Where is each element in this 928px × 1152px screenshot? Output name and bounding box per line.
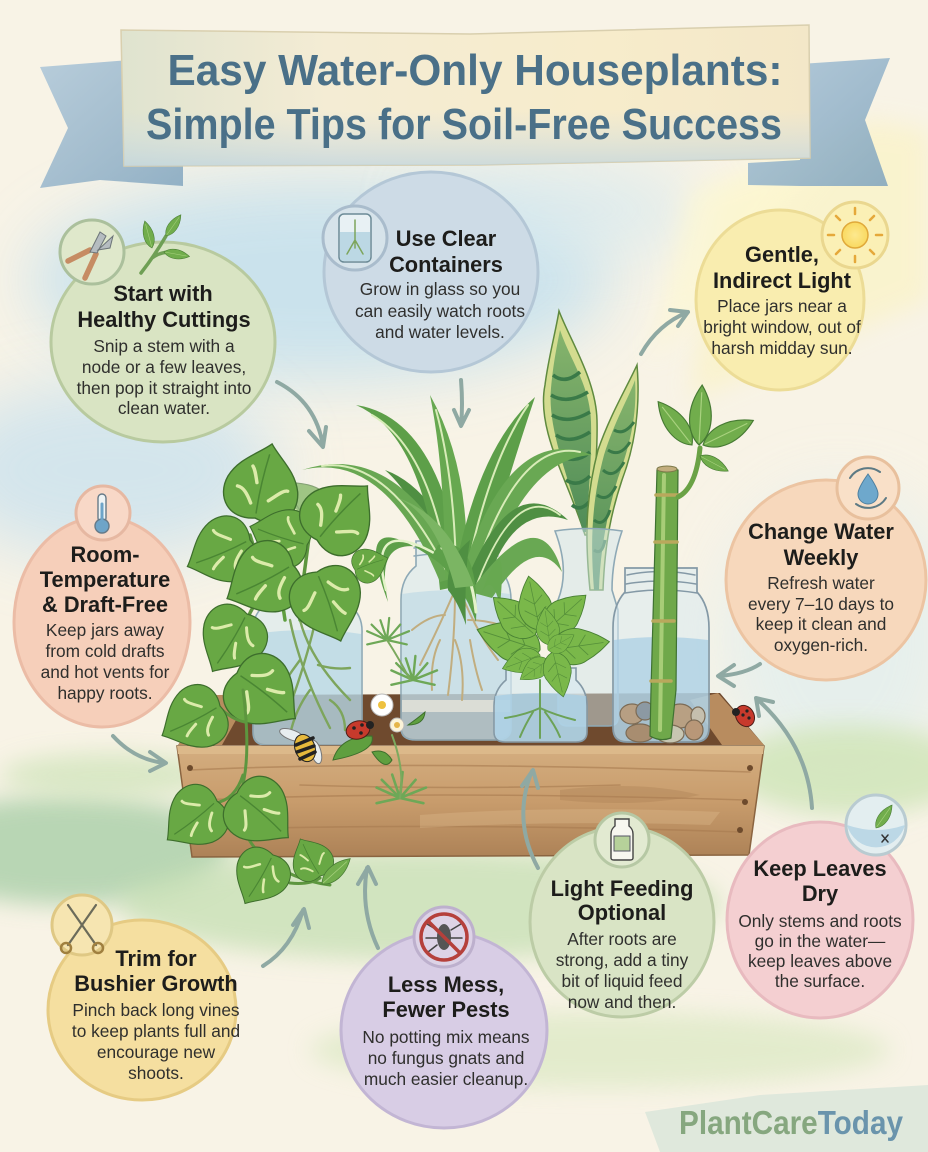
panel: trim for bushier growth: shoots.	[128, 1063, 184, 1083]
icon: sprig	[140, 212, 190, 273]
panel: gentle indirect light: bright window, out of	[703, 317, 861, 337]
mint leaves	[471, 573, 612, 700]
arrow: pests to crate	[358, 867, 378, 948]
bamboo stalk	[650, 468, 678, 740]
panel: use clear containers	[323, 172, 538, 372]
arrow: temperature to crate	[113, 736, 166, 771]
title text: Simple Tips for Soil-Free Success	[146, 100, 782, 149]
panel: room temperature and draft free: from cold drafts	[45, 641, 165, 661]
panel: light feeding optional: After roots are	[567, 929, 677, 949]
panel: start with healthy cuttings: Healthy Cuttings	[77, 307, 251, 332]
panel: keep leaves dry: keep leaves above	[748, 951, 892, 971]
panel: start with healthy cuttings: clean water.	[118, 398, 210, 418]
icon: sun	[822, 202, 888, 268]
pothos trailing vine	[148, 677, 355, 917]
brand footer: PlantCareToday	[679, 1104, 904, 1141]
panel: change water weekly: every 7–10 days to	[748, 594, 894, 614]
title text: Easy Water-Only Houseplants:	[168, 46, 782, 95]
flowers	[371, 694, 404, 732]
panel: start with healthy cuttings: node or a few leaves,	[82, 357, 246, 377]
panel: light feeding optional: Light Feeding	[551, 876, 693, 901]
panel: change water weekly: Refresh water	[767, 573, 875, 593]
panel: start with healthy cuttings: Start with	[113, 281, 213, 306]
icon: pruning shears	[60, 220, 124, 284]
panel: gentle indirect light: harsh midday sun.	[711, 338, 853, 358]
panel: light feeding optional: strong, add a tiny	[556, 950, 689, 970]
spider plant roots	[412, 590, 500, 700]
pothos foliage upper	[174, 436, 394, 747]
panel: less mess fewer pests	[341, 907, 547, 1128]
panel: use clear containers: can easily watch roots	[355, 301, 525, 321]
pale leaf	[256, 464, 340, 548]
title text	[146, 46, 782, 149]
panel: use clear containers: and water levels.	[375, 322, 505, 342]
panel: room temperature and draft free: Keep jars away	[46, 620, 164, 640]
panel: keep leaves dry: Keep Leaves	[753, 856, 887, 881]
panel: room temperature and draft free	[14, 486, 190, 727]
panel: trim for bushier growth: Pinch back long vines	[72, 1000, 240, 1020]
icon: thermometer	[76, 486, 130, 540]
panel: change water weekly	[726, 457, 926, 680]
icon: ladybug on leaf	[333, 718, 374, 760]
bamboo jar	[613, 385, 758, 743]
pothos roots	[270, 600, 350, 735]
icon: fertilizer bottle	[595, 813, 649, 867]
panel: room temperature and draft free: Temperature	[40, 567, 170, 592]
pebbles	[620, 702, 705, 743]
panel: start with healthy cuttings	[51, 212, 275, 442]
wooden crate back	[178, 693, 764, 745]
panel: use clear containers: Grow in glass so you	[360, 279, 520, 299]
panel: trim for bushier growth: Trim for	[115, 946, 197, 971]
panel: light feeding optional: now and then.	[568, 992, 676, 1012]
panel: use clear containers: Containers	[389, 252, 503, 277]
panel: trim for bushier growth: Bushier Growth	[74, 971, 238, 996]
panel: less mess fewer pests: Less Mess,	[388, 972, 504, 997]
icon: no bugs	[414, 907, 474, 967]
panel: start with healthy cuttings: then pop it straight into	[77, 378, 251, 398]
panel: trim for bushier growth: encourage new	[97, 1042, 216, 1062]
panel: keep leaves dry: go in the water—	[755, 931, 886, 951]
glass vase	[555, 528, 622, 726]
panel: gentle indirect light: Place jars near a	[717, 296, 847, 316]
icon: bee	[278, 726, 324, 765]
arrow: containers to plants	[454, 380, 469, 426]
panel: keep leaves dry: the surface.	[775, 971, 865, 991]
panel: gentle indirect light: Gentle,	[745, 242, 819, 267]
title banner	[40, 25, 890, 188]
panel: room temperature and draft free: Room-	[70, 542, 140, 567]
brand footer	[645, 1085, 928, 1152]
icon: jar	[323, 206, 387, 270]
panel: change water weekly: Change Water	[748, 519, 894, 544]
panel: light feeding optional: Optional	[578, 900, 666, 925]
arrow: water to jar	[718, 664, 760, 686]
icon: water cycle	[837, 457, 899, 519]
panel: room temperature and draft free: and hot vents for	[41, 662, 170, 682]
snake plant in vase	[543, 311, 638, 726]
small plantlets and flowers	[367, 618, 437, 803]
panel: less mess fewer pests: Fewer Pests	[382, 997, 510, 1022]
panel: light feeding optional: bit of liquid feed	[561, 971, 683, 991]
icon: leaf above water	[846, 795, 906, 855]
panel: gentle indirect light: Indirect Light	[713, 268, 851, 293]
panel: room temperature and draft free: happy roots.	[57, 683, 153, 703]
arrow: feeding to crate	[522, 770, 538, 868]
panel: less mess fewer pests: No potting mix means	[362, 1027, 530, 1047]
mint jar	[471, 573, 612, 742]
arrow: plants to light	[641, 310, 688, 354]
arrow: leaves to jar	[756, 698, 812, 808]
spider plant foliage	[302, 395, 592, 625]
panel: change water weekly: keep it clean and	[756, 614, 886, 634]
spider plant jar	[401, 541, 511, 740]
panel: keep leaves dry: Dry	[802, 881, 838, 906]
panel: use clear containers: Use Clear	[396, 226, 497, 251]
panel: keep leaves dry: Only stems and roots	[738, 911, 902, 931]
panel: gentle indirect light	[696, 202, 888, 390]
panel: change water weekly: oxygen-rich.	[774, 635, 868, 655]
panel: less mess fewer pests: no fungus gnats and	[368, 1048, 524, 1068]
panel: light feeding optional	[530, 813, 714, 1017]
ribbon tails	[40, 58, 890, 188]
panel: keep leaves dry	[727, 795, 913, 1018]
arrow: trim to vine	[263, 909, 309, 966]
panel: trim for bushier growth	[48, 895, 240, 1100]
panel: less mess fewer pests: much easier cleanup.	[364, 1069, 528, 1089]
panel: start with healthy cuttings: Snip a stem with a	[93, 336, 235, 356]
icon: scissors	[52, 895, 112, 955]
panel: trim for bushier growth: to keep plants full and	[72, 1021, 240, 1041]
icon: ladybug on crate	[732, 702, 758, 730]
arrow: cuttings to plants	[277, 382, 326, 447]
panel: change water weekly: Weekly	[784, 545, 858, 570]
wooden crate front	[177, 746, 764, 857]
pothos jar	[253, 570, 362, 745]
panel: room temperature and draft free: & Draft-Free	[42, 592, 168, 617]
